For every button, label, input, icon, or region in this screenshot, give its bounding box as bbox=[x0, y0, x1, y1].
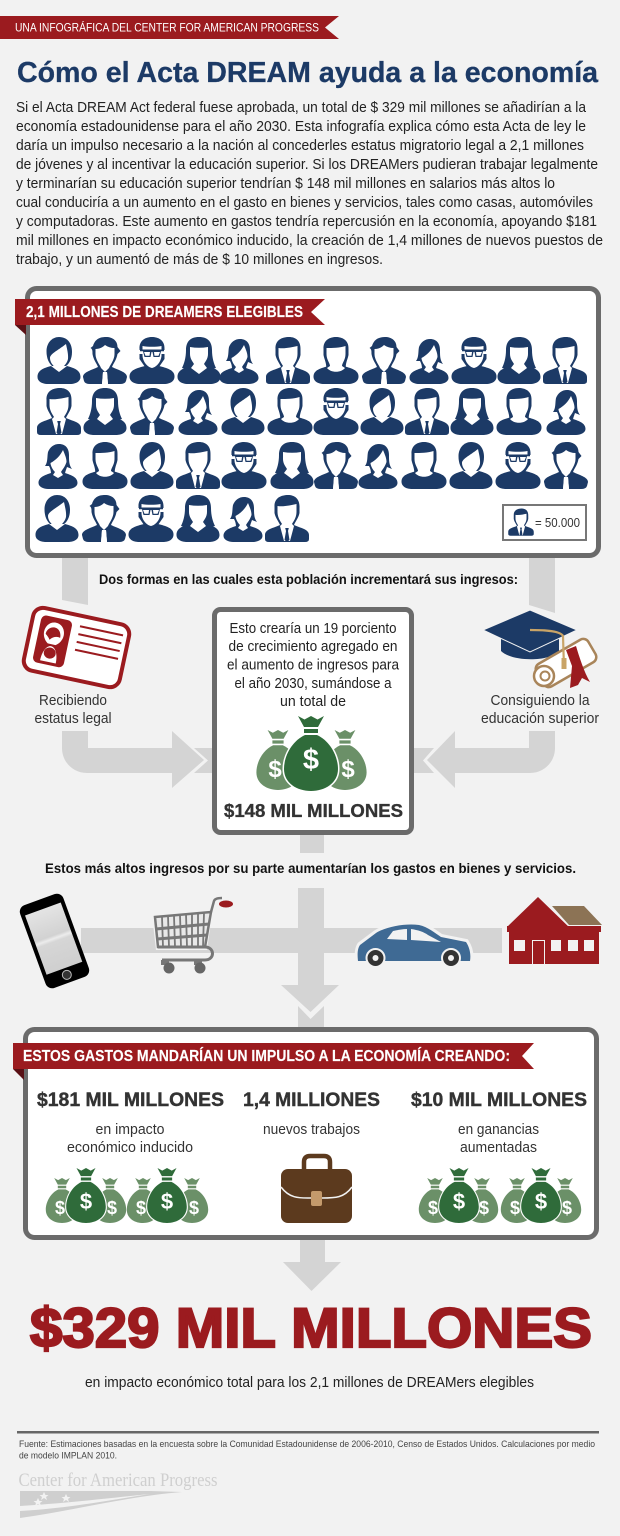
intro text block: trabajo, y un aumentó de más de $ 10 millones en ingresos. bbox=[16, 252, 383, 268]
intro text block bbox=[16, 100, 603, 268]
label: legal status: estatus legal bbox=[34, 711, 112, 727]
connector: stub below center box bbox=[300, 830, 324, 853]
icon: money bags left: $ bbox=[55, 1198, 65, 1218]
ribbon: economic boost heading bbox=[13, 1043, 534, 1080]
icon: money bags left: $ bbox=[161, 1189, 173, 1214]
top ribbon: UNA INFOGRÁFICA DEL CENTER FOR AMERICAN PROGRESS bbox=[15, 20, 319, 34]
column: increased earnings: aumentadas bbox=[460, 1140, 537, 1156]
panel: dreamers bbox=[15, 288, 598, 556]
icon: shopping cart bbox=[152, 898, 233, 974]
total caption: en impacto económico total para los 2,1 millones de DREAMers elegibles bbox=[85, 1375, 534, 1391]
amount: 148 billion: $148 MIL MILLONES bbox=[224, 801, 403, 821]
ribbon: dreamers heading: 2,1 MILLONES DE DREAMERS ELEGIBLES bbox=[26, 304, 303, 321]
panel: center earnings box bbox=[214, 610, 412, 832]
icon: money bags: $ bbox=[341, 756, 355, 783]
column: induced impact bbox=[37, 1089, 224, 1223]
intro text block: y computadoras. Este aumento en gastos tendría repercusión en la economía, apoyando $181 bbox=[16, 214, 597, 230]
title: Cómo el Acta DREAM ayuda a la economía bbox=[17, 57, 599, 89]
logo: Center for American Progress bbox=[18, 1470, 218, 1518]
top ribbon bbox=[0, 16, 339, 39]
column: induced impact: económico inducido bbox=[67, 1140, 193, 1156]
icon: money bags right bbox=[419, 1168, 581, 1223]
text: 19 percent growth: el año 2030, sumándose a bbox=[234, 676, 392, 692]
icon: money bags left: $ bbox=[136, 1198, 146, 1218]
icon: money bags right: $ bbox=[535, 1189, 547, 1214]
label: higher education bbox=[481, 693, 599, 727]
legend: one icon equals 50,000: = 50.000 bbox=[535, 516, 580, 530]
text: 19 percent growth: Esto crearía un 19 porciento bbox=[230, 621, 396, 637]
icon: car bbox=[358, 924, 470, 967]
column: increased earnings bbox=[411, 1089, 587, 1223]
intro text block: y terminarían su educación superior tendrían $ 148 mil millones en salarios más altos lo bbox=[16, 176, 555, 192]
intro text block: daría un impulso necesario a la nación al concederles estatus migratorio legal a 2,1 millones bbox=[16, 138, 584, 154]
icon: money bags right: $ bbox=[479, 1198, 489, 1218]
icon: briefcase bbox=[281, 1156, 352, 1223]
icon: money bags left bbox=[46, 1168, 208, 1223]
source note: de modelo IMPLAN 2010. bbox=[19, 1450, 117, 1462]
icon: graduation cap and diploma bbox=[483, 610, 598, 689]
arrow: higher education into center box bbox=[410, 731, 555, 788]
label: legal status bbox=[34, 693, 112, 727]
legend: one icon equals 50,000 bbox=[503, 505, 586, 540]
ribbon: dreamers heading bbox=[15, 299, 325, 335]
icon: money bags right: $ bbox=[453, 1189, 465, 1214]
icon: money bags right: $ bbox=[428, 1198, 438, 1218]
icon: money bags left: $ bbox=[189, 1198, 199, 1218]
intro text block: cual conduciría a un aumento en el gasto en bienes y servicios, tales como casas, automóviles bbox=[16, 195, 593, 211]
label: higher education: Consiguiendo la bbox=[490, 693, 590, 709]
subheading: two ways: Dos formas en las cuales esta población incrementará sus ingresos: bbox=[99, 571, 518, 587]
text: 19 percent growth bbox=[227, 621, 400, 710]
icon: house bbox=[507, 897, 602, 964]
icon: money bags: $ bbox=[268, 756, 282, 783]
arrow: legal status into center box bbox=[62, 731, 216, 788]
people pictogram grid bbox=[36, 337, 588, 542]
intro text block: Si el Acta DREAM Act federal fuese aprobada, un total de $ 329 mil millones se añadirían a la bbox=[16, 100, 587, 116]
connector: horizontal spending bar and central arrow bbox=[81, 888, 502, 1030]
label: legal status: Recibiendo bbox=[39, 693, 107, 709]
text: 19 percent growth: de crecimiento agregado en bbox=[228, 639, 398, 655]
column: new jobs: nuevos trabajos bbox=[263, 1122, 360, 1138]
icon: money bags bbox=[256, 716, 367, 791]
column: increased earnings: en ganancias bbox=[458, 1122, 539, 1138]
intro text block: mil millones en impacto económico inducido, la creación de 1,4 millones de nuevos puestos de bbox=[16, 233, 603, 249]
label: higher education: educación superior bbox=[481, 711, 599, 727]
text: 19 percent growth: un total de bbox=[280, 694, 346, 710]
ribbon: economic boost heading: ESTOS GASTOS MANDARÍAN UN IMPULSO A LA ECONOMÍA CREANDO: bbox=[23, 1048, 510, 1065]
column: induced impact: en impacto bbox=[96, 1122, 164, 1138]
logo: Center for American Progress: Center for American Progress bbox=[18, 1470, 218, 1491]
icon: money bags: $ bbox=[303, 744, 319, 776]
total headline: $329 MIL MILLONES bbox=[30, 1296, 592, 1359]
column: new jobs: 1,4 MILLIONES bbox=[243, 1089, 380, 1111]
footer rule bbox=[17, 1431, 599, 1434]
column: induced impact: $181 MIL MILLONES bbox=[37, 1089, 224, 1111]
panel: economic boost bbox=[13, 1030, 596, 1238]
icon: money bags left: $ bbox=[80, 1189, 92, 1214]
icon: smartphone bbox=[18, 892, 91, 990]
subheading: higher spending: Estos más altos ingresos por su parte aumentarían los gastos en bienes y servicios. bbox=[45, 860, 576, 876]
icon: money bags right: $ bbox=[562, 1198, 572, 1218]
intro text block: de jóvenes y al incentivar la educación superior. Si los DREAMers pudieran trabajar legalmente bbox=[16, 157, 598, 173]
text: 19 percent growth: el aumento de ingresos para bbox=[227, 658, 400, 674]
source note bbox=[19, 1439, 595, 1462]
connector: upper pipes from dreamers panel bbox=[62, 550, 555, 613]
arrow: below economy panel bbox=[283, 1235, 341, 1291]
column: new jobs bbox=[243, 1089, 380, 1223]
icon: money bags left: $ bbox=[107, 1198, 117, 1218]
intro text block: economía estadounidense para el año 2030. Esta infografía explica cómo esta Acta de ley le bbox=[16, 119, 586, 135]
column: increased earnings: $10 MIL MILLONES bbox=[411, 1089, 587, 1111]
icon: ID card bbox=[22, 606, 131, 689]
icon: money bags right: $ bbox=[510, 1198, 520, 1218]
